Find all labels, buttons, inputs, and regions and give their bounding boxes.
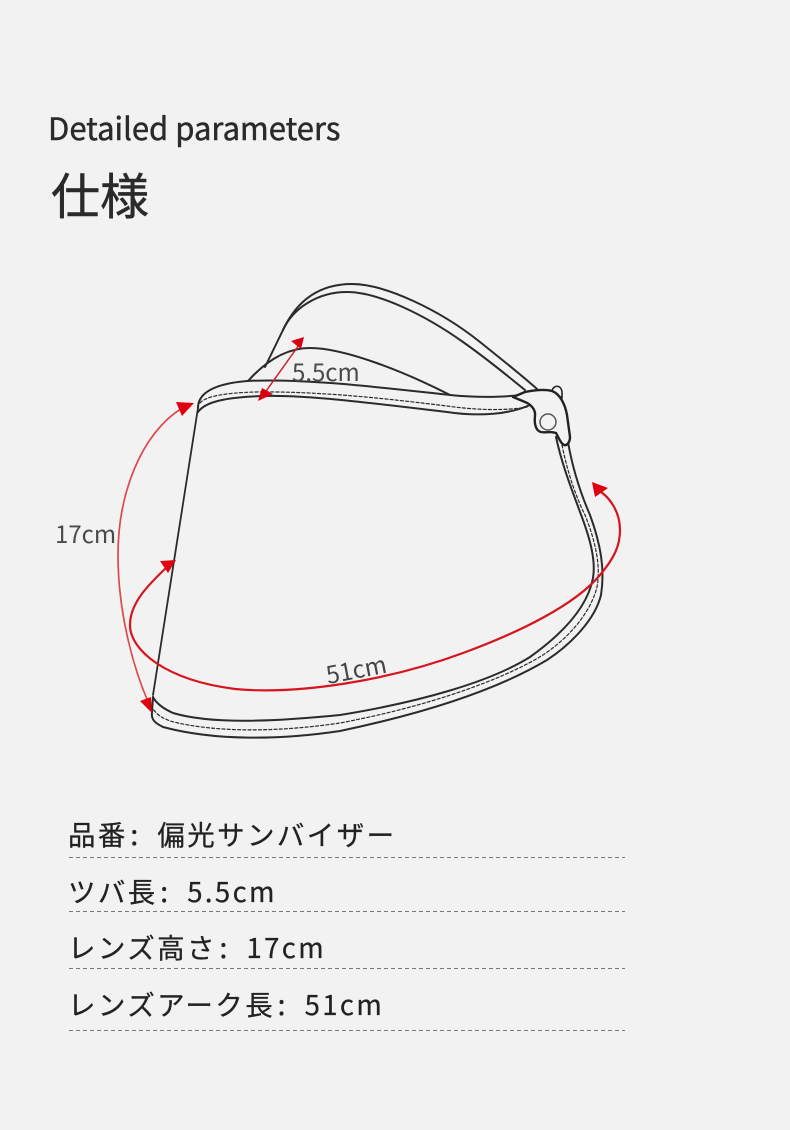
spec row: レンズアーク長: レンズアーク長 51cm [68,983,384,1023]
divider [69,857,625,858]
label: 17cm: 17cm [55,515,116,550]
arrow: lens height 17cm [118,402,194,713]
icon: side clip [513,386,570,445]
label: 51cm: 51cm [323,645,389,691]
heading: 仕様: 仕様 [51,158,149,229]
label: 5.5cm: 5.5cm [292,353,360,388]
divider [69,968,625,969]
divider [69,911,625,912]
spec row: 品番: 品番 偏光サンバイザー [68,813,397,853]
divider [69,1030,625,1031]
heading: Detailed parameters: Detailed parameters [48,104,340,149]
spec row: ツバ長: : [160,869,171,911]
visor outline [152,284,603,738]
spec row: レンズ高さ: : [219,925,230,967]
spec row: ツバ長: ツバ長 5.5cm [68,870,277,910]
spec row: 品番: : [130,812,141,854]
spec row: レンズ高さ: レンズ高さ 17cm [68,926,326,966]
arrow: lens arc 51cm [130,482,620,690]
spec row: レンズアーク長: : [278,982,288,1024]
arrow: brim width 5.5cm [258,337,304,401]
